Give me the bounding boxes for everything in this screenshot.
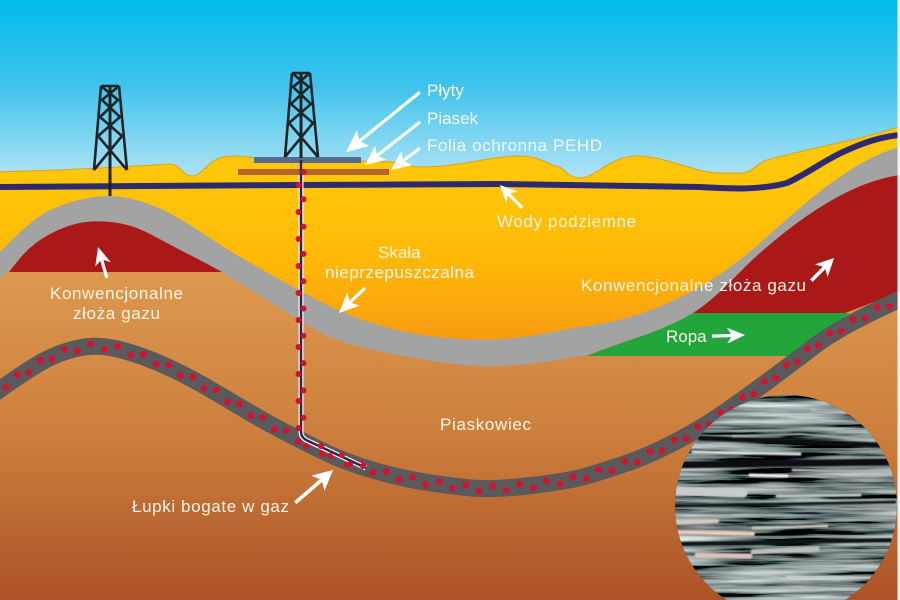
label: Skała nieprzepuszczalna: nieprzepuszczalna xyxy=(325,263,475,282)
label: Łupki bogate w gaz: Łupki bogate w gaz xyxy=(132,497,289,516)
impermeable rock layer xyxy=(0,147,900,400)
conventional gas deposit right xyxy=(693,175,900,313)
conventional gas deposit left xyxy=(9,221,222,272)
label: Piasek: Piasek xyxy=(427,109,479,128)
label: Konwencjonalne złoża gazu right: Konwencjonalne złoża gazu xyxy=(581,276,806,295)
arrow: Folia xyxy=(386,141,425,177)
right edge strip xyxy=(898,0,900,600)
arrow: Łupki xyxy=(289,462,340,510)
label: Skała nieprzepuszczalna: Skała xyxy=(378,243,421,262)
sky xyxy=(0,0,900,190)
label: Ropa: Ropa xyxy=(666,327,707,346)
arrow: gas right xyxy=(805,252,840,287)
arrow: Piasek xyxy=(359,115,426,172)
label: Wody podziemne: Wody podziemne xyxy=(497,212,636,231)
arrow: Skała nieprzepuszczalna xyxy=(333,282,371,319)
label: Konwencjonalne złoża gazu left: Konwencjonalne xyxy=(50,284,183,303)
sand and aquifer layer xyxy=(0,126,900,400)
protective PEHD foil xyxy=(238,169,389,175)
drill rig right xyxy=(285,73,318,158)
label: Konwencjonalne złoża gazu left: złoża gazu xyxy=(73,304,160,323)
gas-rich shale layer xyxy=(0,294,900,491)
groundwater line xyxy=(0,135,900,188)
sand layer pad xyxy=(254,157,361,163)
sandstone layer xyxy=(0,175,900,600)
rock sample photo xyxy=(670,390,900,600)
oil deposit xyxy=(587,313,850,356)
horizontal well bore xyxy=(298,160,366,468)
arrow: gas left xyxy=(90,245,115,280)
arrow: Ropa xyxy=(712,327,745,344)
label: Piaskowiec: Piaskowiec xyxy=(440,415,532,434)
drill rig left xyxy=(94,86,127,196)
label: Folia ochronna PEHD: Folia ochronna PEHD xyxy=(427,136,602,155)
arrow: Wody podziemne xyxy=(494,179,528,214)
arrow: Płyty xyxy=(340,84,426,160)
label: Płyty: Płyty xyxy=(427,81,464,100)
